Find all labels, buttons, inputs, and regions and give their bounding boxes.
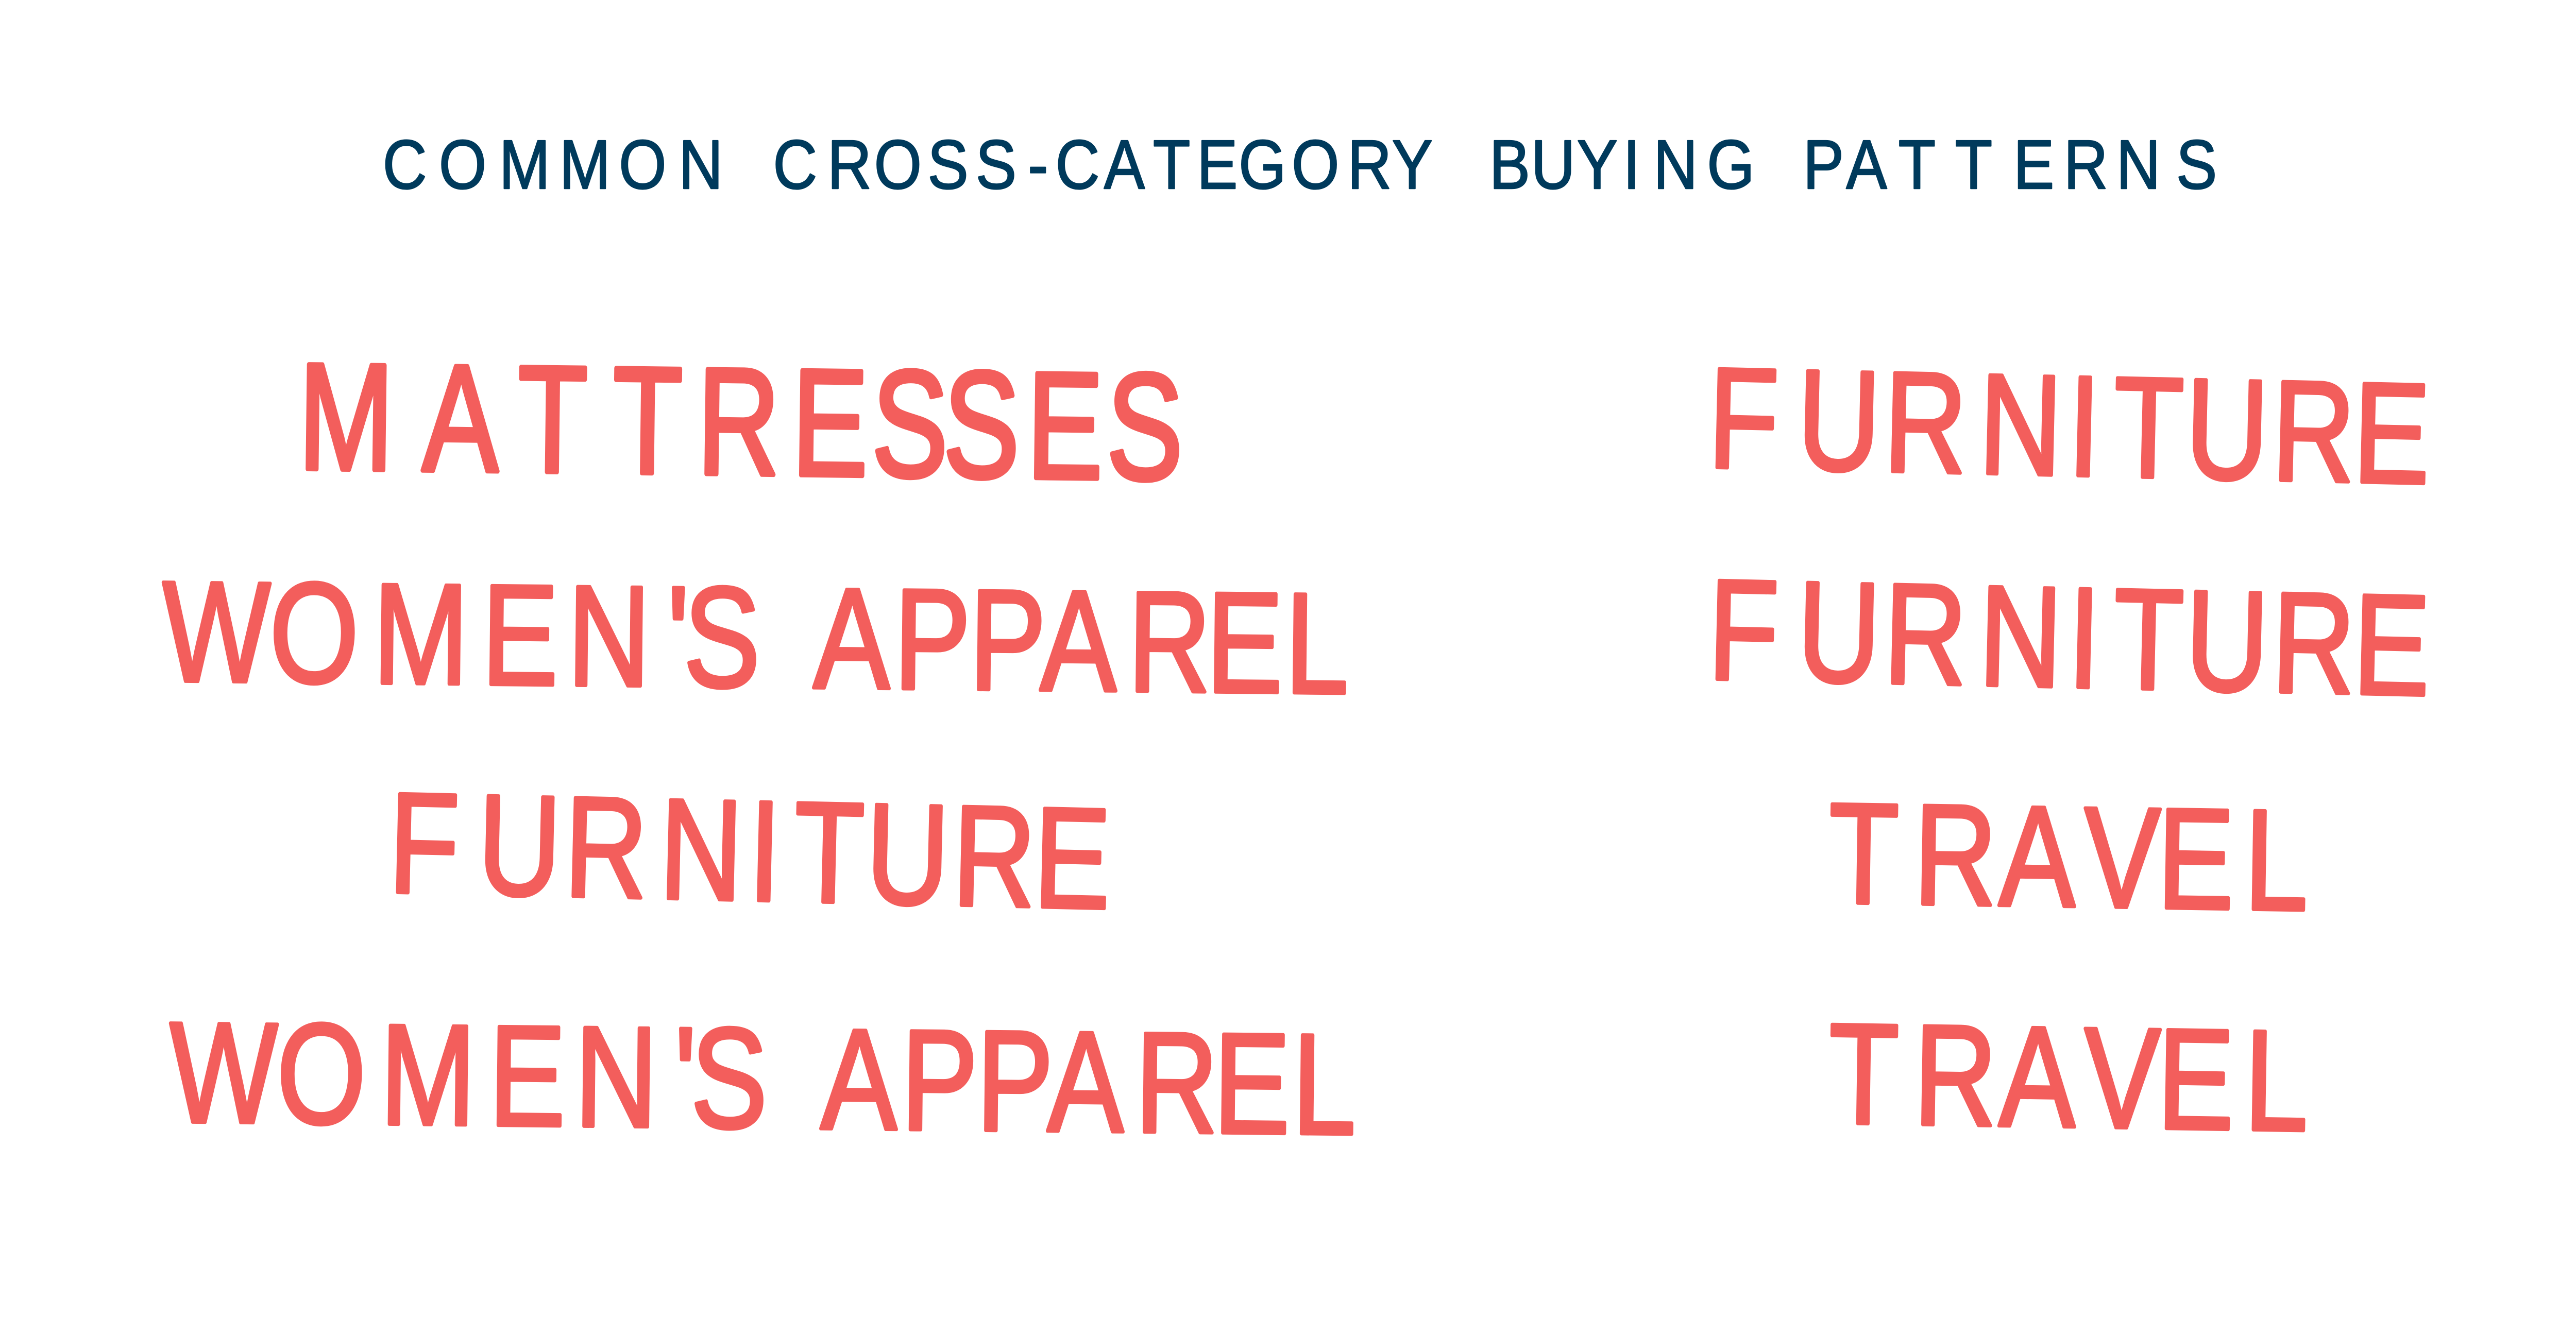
pattern 2: second purchase: FURNITURE xyxy=(1707,550,2432,726)
pattern 4: second purchase: TRAVEL xyxy=(1827,994,2310,1161)
pattern 4: first purchase: WOMEN'S APPAREL xyxy=(168,992,1357,1165)
pattern 3: second purchase: TRAVEL xyxy=(1827,774,2310,941)
pattern 2: first purchase: WOMEN'S APPAREL xyxy=(161,552,1350,724)
pattern 3: first purchase: FURNITURE xyxy=(387,763,1112,939)
title: COMMON CROSS-CATEGORY BUYING PATTERNS xyxy=(383,126,2217,203)
pattern 1: first purchase: MATTRESSES xyxy=(298,332,1184,512)
pattern 1: second purchase: FURNITURE xyxy=(1707,338,2432,514)
